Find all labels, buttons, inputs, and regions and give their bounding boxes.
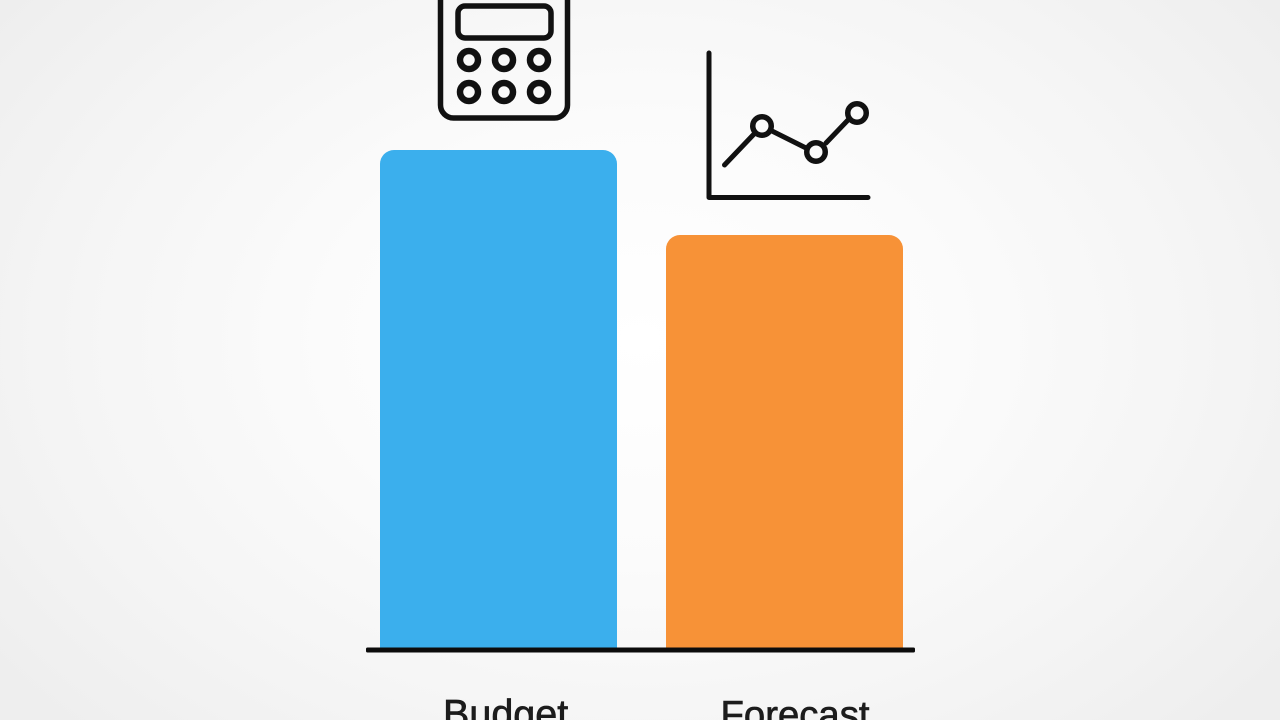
icon: line chart xyxy=(709,53,868,198)
icon: calculator xyxy=(440,0,568,118)
bar: Budget xyxy=(380,150,617,648)
bar: Forecast xyxy=(666,235,903,648)
chart baseline xyxy=(366,648,915,652)
